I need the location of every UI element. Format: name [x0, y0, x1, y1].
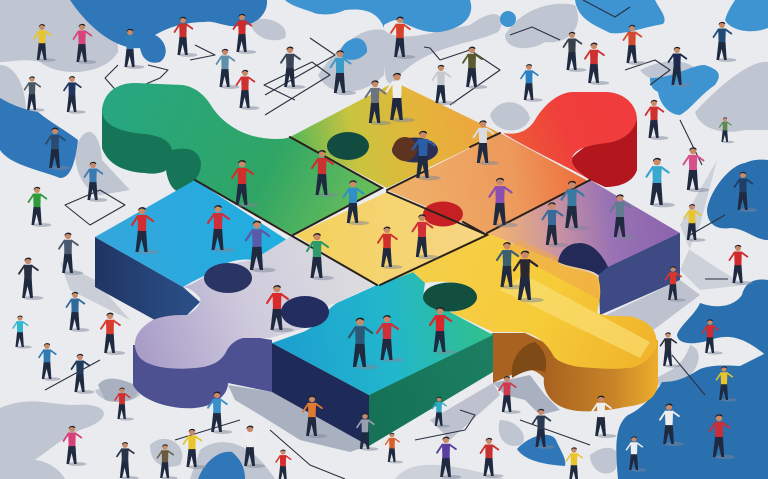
piece: green — [102, 83, 382, 235]
background blobs: blue patches — [0, 0, 565, 479]
piece: red knob — [503, 92, 637, 180]
piece: centre yellow — [295, 192, 487, 285]
piece: purple — [487, 180, 680, 267]
piece side: teal navy — [272, 343, 369, 446]
piece: yellow highlight band — [500, 275, 650, 358]
piece: bright yellow — [380, 233, 657, 369]
puzzle holes — [204, 132, 608, 328]
piece side: green knob — [102, 108, 203, 192]
piece: orange — [387, 133, 590, 233]
puzzle seams — [195, 133, 590, 285]
piece side: yellow orange — [493, 333, 658, 411]
people on the puzzle — [132, 80, 636, 369]
background blobs: sky blue patches — [285, 0, 768, 115]
piece: orange band on yellow — [505, 240, 600, 300]
piece side: lilac knob — [133, 335, 272, 408]
piece: teal — [272, 272, 493, 395]
piece side: teal green — [369, 333, 493, 446]
puzzle — [95, 82, 680, 446]
background blobs: puzzle ground shadows — [60, 262, 700, 452]
background blobs: deep blue patches — [616, 160, 768, 479]
piece: cyan — [95, 180, 287, 287]
piece: olive yellow — [290, 82, 500, 188]
piece side: red knob — [572, 120, 637, 187]
piece: lilac — [135, 235, 377, 369]
piece side: notch dark — [512, 342, 546, 378]
piece side: purple navy — [598, 233, 680, 315]
piece side: navy left of cyan piece — [95, 237, 200, 335]
